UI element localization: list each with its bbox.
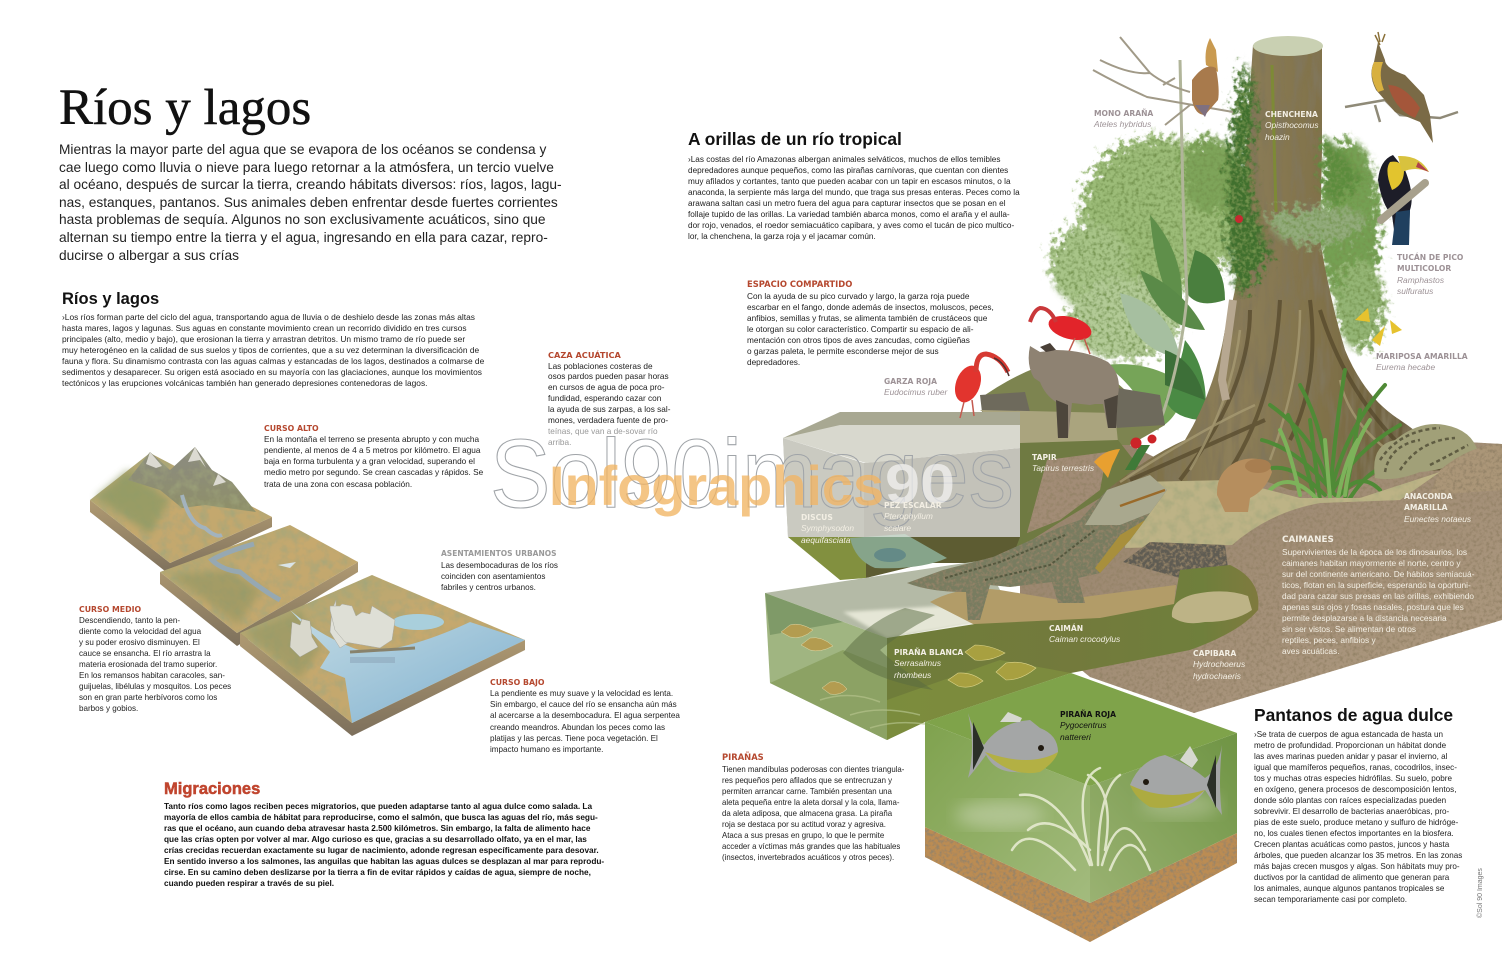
text: pantanos: árboles, que pueden alcanzar los 35 metros. En las zonas — [1254, 851, 1462, 860]
text: pirañas: aleta pequeña entre la aleta dorsal y la cola, llama- — [722, 798, 899, 806]
animal: spider monkey on branch — [1093, 37, 1233, 125]
watermark: Infographics: Infographics — [549, 454, 884, 517]
text: caimanes: Supervivientes de la época de los dinosaurios, los — [1282, 547, 1467, 557]
text: tropical river intro: ›Las costas del río Amazonas albergan animales selváticos, muchos de ellos temibles — [688, 154, 1000, 164]
watermark: 90: 90 — [885, 452, 955, 515]
label: anaconda amarilla: AMARILLA — [1404, 503, 1448, 512]
label: capibara: Hydrochoerus — [1193, 659, 1245, 669]
text: migraciones — [164, 802, 604, 888]
heading: espacio compartido: ESPACIO COMPARTIDO — [747, 279, 852, 289]
block: upper course mountains — [90, 447, 272, 575]
label: tucán: Ramphastos — [1397, 275, 1444, 285]
label: chenchena — [1265, 110, 1319, 142]
label: piraña roja: Pygocentrus — [1060, 720, 1107, 730]
text: migraciones: que las crías opten por volver al mar. Algo curioso es que, gracias a su desarrollado olfato, ya en el mar, las — [164, 835, 587, 844]
label: anaconda amarilla: ANACONDA — [1404, 492, 1453, 501]
label: mono araña: Ateles hybridus — [1094, 119, 1151, 129]
text: caza acuática: osos pardos pueden pasar horas — [548, 372, 669, 381]
water reflection streaks — [820, 695, 925, 728]
text: curso bajo — [490, 689, 680, 754]
label: anaconda amarilla — [1404, 492, 1471, 524]
text: pantanos: igual que mamíferos pequeños, ranas, cocodrilos, insec- — [1254, 763, 1457, 772]
text: migraciones: Tanto ríos como lagos reciben peces migratorios, que pueden adaptarse tanto al agua dulce como salada. La — [164, 802, 592, 810]
text: tropical river intro: depredadores aunque pequeños, como las pirañas carnívoras, que cuentan con dientes — [688, 166, 1008, 174]
text: pantanos: en oxígeno, genera procesos de descomposición lentos, — [1254, 785, 1456, 794]
text: curso bajo: al acercarse a la desembocadura. El agua serpentea — [490, 711, 680, 720]
plant: red and orange flowers — [1094, 434, 1156, 478]
text: tropical river intro: arawana saltan casi un metro fuera del agua para capturar insectos que se posan en el — [688, 198, 1006, 208]
plant: pale aquatic weed — [1012, 768, 1150, 870]
chart: river courses blocks — [90, 447, 525, 736]
heading: curso bajo: CURSO BAJO — [490, 678, 545, 687]
text: pirañas: acceder a víctimas más grandes que las habituales — [722, 842, 900, 850]
main title: Ríos y lagos — [59, 80, 311, 136]
intro text: alternan su tiempo entre la tierra y el agua, ingresando en ella para cazar, repro- — [59, 230, 548, 245]
text: curso alto: medio metro por segundo. Se crean cascadas y rápidos. Se — [264, 468, 483, 477]
river water block — [765, 560, 1258, 740]
label: mariposa amarilla — [1376, 352, 1468, 372]
intro text: cae luego como lluvia o nieve para luego retornar a la atmósfera, un tercio vuelve — [59, 160, 554, 175]
text: pantanos: tos y muchas otras especies hidrófilas. Su suelo, pobre — [1254, 774, 1452, 783]
heading: pantanos de agua dulce: Pantanos de agua dulce — [1254, 705, 1453, 725]
text: asentamientos urbanos — [441, 560, 558, 592]
heading: Ríos y lagos: Ríos y lagos — [62, 290, 159, 308]
heading: caimanes: CAIMANES — [1282, 535, 1334, 545]
text: caza acuática: mones, verdadera fuente de pro- — [548, 416, 668, 425]
text: caza acuática: en cursos de agua de poca pro- — [548, 383, 664, 392]
text: curso bajo: impacto humano es importante. — [490, 745, 603, 754]
heading: curso medio: CURSO MEDIO — [79, 605, 141, 614]
label: mono araña: MONO ARAÑA — [1094, 109, 1153, 118]
text: migraciones: crías crecidas recuerdan exactamente su lugar de nacimiento, adonde regresan específicamente para desovar. — [164, 846, 599, 855]
text: rivers and lakes — [62, 312, 484, 388]
text: pantanos — [1254, 730, 1462, 904]
label: garza roja: GARZA ROJA — [884, 377, 937, 386]
label: mariposa amarilla: MARIPOSA AMARILLA — [1376, 352, 1468, 361]
text: caza acuática: arriba. — [548, 438, 571, 447]
text: caimanes: aves acuáticas. — [1282, 646, 1340, 656]
labels over watermark panel: discus: DISCUS — [801, 513, 833, 522]
text: curso alto: pendiente, al menos de 4 a 5 metros por kilómetro. El agua — [264, 446, 480, 455]
text: pirañas: permiten arrancar carne. También presentan una — [722, 786, 892, 796]
label: piraña roja: PIRAÑA ROJA — [1060, 710, 1116, 719]
text: curso bajo: creando meandros. Abundan los peces como las — [490, 723, 665, 732]
text: pantanos: ductivos por la cantidad de alimento que generan para — [1254, 873, 1449, 882]
text: curso medio: son en gran parte herbívoros como los — [79, 692, 217, 702]
text: espacio compartido — [747, 292, 994, 367]
text: asentamientos urbanos: Las desembocaduras de los ríos — [441, 560, 558, 570]
labels over watermark panel: discus — [801, 513, 854, 545]
text: curso bajo: platijas y las percas. Tiene poca vegetación. El — [490, 734, 658, 743]
text: curso medio: cauce se ensancha. El río arrastra la — [79, 648, 211, 658]
text: tropical river intro — [688, 154, 1020, 240]
label: garza roja: Eudocimus ruber — [884, 387, 947, 397]
rocks — [1123, 542, 1228, 578]
text: pirañas: Tienen mandíbulas poderosas con dientes triangula- — [722, 764, 904, 774]
text: migraciones: ras que el océano, aun cuando deba atravesar hasta 2.500 kilómetros. Sin embargo, la falta de alimento hace — [164, 824, 590, 833]
distant bank with rocks and water — [980, 368, 1165, 446]
label: piraña roja — [1060, 710, 1116, 742]
text: pirañas: da aleta adiposa, que almacena grasa. La piraña — [722, 808, 892, 818]
tree trunk and buttress roots — [1107, 36, 1455, 510]
label: pez escalar — [884, 501, 942, 533]
label: piraña blanca: Serrasalmus — [894, 658, 941, 668]
text: pirañas — [722, 764, 904, 862]
foliage: background tree — [1050, 137, 1384, 360]
text: espacio compartido: anfibios, semillas y frutas, se alimenta también de crustáceos que — [747, 314, 987, 323]
text: caimanes: reptiles, peces, anfibios y — [1282, 635, 1376, 645]
animal: caiman — [843, 475, 1167, 690]
watermark: Sol90images outline: Sol90images — [490, 419, 1014, 528]
text: pantanos: Crecen plantas acuáticas como pastos, juncos y hasta — [1254, 840, 1449, 849]
chart: tropical river habitat cross-section — [765, 32, 1502, 942]
heading: asentamientos urbanos: ASENTAMIENTOS URBANOS — [441, 549, 557, 558]
label: pez escalar: scalare — [884, 523, 911, 533]
animal: capybara on bank — [1217, 458, 1272, 512]
text: curso medio: barbos y gobios. — [79, 704, 138, 712]
labels over watermark panel: discus: aequifasciata — [801, 535, 850, 545]
label: caimán: Caiman crocodylus — [1049, 634, 1120, 644]
text: pantanos: ›Se trata de cuerpos de agua estancada de hasta un — [1254, 730, 1443, 738]
text: espacio compartido: depredadores. — [747, 358, 800, 367]
mossy sand bank — [1125, 472, 1440, 548]
heading: migraciones: Migraciones — [164, 780, 260, 798]
text: caza acuática — [548, 362, 670, 447]
label: anaconda amarilla: Eunectes notaeus — [1404, 514, 1471, 524]
animal: white piranhas — [781, 624, 847, 694]
text: tropical river intro: lor, la chenchena, la garza roja y el jacamar común. — [688, 232, 876, 240]
swamp cube — [925, 673, 1237, 942]
text: caimanes: ticos, flotan en la superficie, esperando la oportuni- — [1282, 580, 1471, 590]
animal: scarlet ibis right — [1030, 308, 1094, 358]
label: pez escalar: PEZ ESCALAR — [884, 501, 942, 510]
text: curso alto: trata de una zona con escasa población. — [264, 480, 412, 489]
label: capibara: hydrochaeris — [1193, 671, 1241, 681]
intro text: al océano, después de surcar la tierra, creando hábitats diversos: ríos, lagos, lagu- — [59, 177, 562, 192]
animal: scarlet ibis left — [950, 354, 1009, 418]
text: rivers and lakes: sedimentos y desaparecer. Su origen está asociado en su mayoría con las glaciaciones, aunque los movimientos — [62, 367, 482, 377]
label: piraña roja: nattereri — [1060, 732, 1091, 742]
text: curso alto: baja en forma turbulenta y a gran velocidad, superando el — [264, 457, 475, 466]
intro text: Mientras la mayor parte del agua que se evapora de los océanos se condensa y — [59, 142, 546, 157]
text: caza acuática: fundidad, esperando cazar con — [548, 394, 661, 403]
text: caza acuática: la ayuda de sus zarpas, a los sal- — [548, 405, 670, 414]
animal: hoatzin on branch — [1345, 32, 1458, 143]
text: pantanos: pias de este suelo, produce metano y sulfuro de hidróge- — [1254, 818, 1458, 827]
text: curso alto: En la montaña el terreno se presenta abrupto y con mucha — [264, 434, 479, 444]
animal: tapir — [1029, 343, 1119, 438]
text: pirañas: Ataca a sus presas en grupo, lo que le permite — [722, 830, 884, 840]
label: tapir — [1032, 453, 1094, 473]
animal: toucan — [1378, 155, 1429, 245]
label: tucán: TUCÁN DE PICO — [1397, 253, 1463, 262]
ground right of tree — [1430, 444, 1502, 495]
text: caimanes: permite desplazarse a la distancia necesaria — [1282, 613, 1447, 623]
text: tropical river intro: follaje tupido de las orillas. La variedad también abarca monos, como el araña y el aulla- — [688, 210, 1010, 218]
text: migraciones: cuando pueden respirar a través de su piel. — [164, 879, 334, 888]
text: curso medio: y su poder erosivo disminuyen. El — [79, 638, 200, 646]
label: garza roja — [884, 377, 948, 397]
text: espacio compartido: o garzas paleta, le permite esconderse mejor de sus — [747, 347, 939, 356]
label: caimán: CAIMÁN — [1049, 624, 1083, 633]
text: curso medio: diente como la velocidad del agua — [79, 626, 201, 636]
text: pantanos: los animales, aunque algunos pantanos tropicales se — [1254, 884, 1444, 893]
animal: white piranhas in dark water — [948, 645, 1036, 687]
heading: caza acuática: CAZA ACUÁTICA — [548, 350, 621, 360]
labels over watermark panel: discus: Symphysodon — [801, 523, 854, 533]
text: pantanos: más bajas crecen musgos y algas. Son hábitats muy pro- — [1254, 862, 1460, 871]
label: chenchena: hoazin — [1265, 132, 1290, 142]
heading: curso alto: CURSO ALTO — [264, 424, 319, 433]
label: piraña blanca — [894, 648, 964, 680]
text: espacio compartido: escarbar en el fango, donde además de insectos, moluscos, peces, — [747, 303, 994, 312]
soil mass — [1020, 440, 1502, 713]
animal: red piranha right — [1130, 745, 1222, 815]
text: curso medio — [79, 616, 231, 712]
text: pantanos: secan temporariamente casi por completo. — [1254, 895, 1407, 904]
text: curso medio: materia erosionada del tramo superior. — [79, 660, 217, 668]
text: caimanes: dad para cazar sus presas en las orillas, exhibiendo — [1282, 591, 1474, 601]
label: tucán: sulfuratus — [1397, 286, 1433, 296]
text: caimanes: apenas sus ojos y fosas nasales, postura que les — [1282, 602, 1464, 612]
animal: red piranha left — [968, 712, 1058, 778]
text: caimanes: sur del continente americano. De hábitos semiacuá- — [1282, 569, 1474, 579]
plant: banana leaves — [1106, 215, 1225, 430]
text: curso bajo: La pendiente es muy suave y la velocidad es lenta. — [490, 689, 673, 698]
text: pantanos: sobrevivir. El desarrollo de bacterias anaeróbicas, pro- — [1254, 807, 1449, 816]
text: pantanos: metro de profundidad. Proporcionan un hábitat donde — [1254, 741, 1446, 750]
text: rivers and lakes: principales (alto, medio y bajo), que erosionan la tierra y arrastran detritos. Un mismo tramo de río puede ser — [62, 334, 465, 344]
text: rivers and lakes: fauna y flora. Su dinamismo contrasta con las aguas calmas y estancadas de los lagos, destinados a colmarse de — [62, 356, 484, 366]
label: tapir: Tapirus terrestris — [1032, 463, 1094, 473]
label: piraña blanca: PIRAÑA BLANCA — [894, 648, 963, 657]
text: curso medio: Descendiendo, tanto la pen- — [79, 616, 180, 624]
text: pantanos: no, los cuales tienen efectos importantes en la biosfera. — [1254, 829, 1454, 838]
text: pantanos: donde sólo plantas con raíces especializadas pueden — [1254, 796, 1446, 805]
soil cut below bank — [1027, 452, 1107, 533]
foreground plants at tree base — [1262, 370, 1400, 500]
label: caimán — [1049, 624, 1120, 644]
label: chenchena: CHENCHENA — [1265, 110, 1318, 119]
heading: pirañas: PIRAÑAS — [722, 752, 764, 762]
credit: ©Sol 90 Images — [1477, 868, 1484, 918]
vines and epiphytes on trunk — [1228, 62, 1365, 295]
text: caimanes: sin ser vistos. Se alimentan de otros — [1282, 624, 1416, 634]
text: migraciones: mayoría de ellos cambia de hábitat para reproducirse, como el salmón, que busca las aguas del río, más segu- — [164, 813, 598, 822]
block: middle course — [160, 525, 358, 646]
text: espacio compartido: le otorgan su color característico. Compartir su espacio de ali- — [747, 325, 974, 334]
text: caimanes: caimanes habitan mayormente el norte, centro y — [1282, 558, 1461, 568]
label: tucán — [1397, 252, 1463, 296]
text: curso medio: En los remansos habitan caracoles, san- — [79, 670, 225, 680]
intro text — [59, 142, 562, 263]
icon: yellow butterflies — [1355, 308, 1402, 346]
label: pez escalar: Pterophyllum — [884, 511, 933, 521]
green bank slope — [1000, 440, 1140, 560]
text: asentamientos urbanos: coinciden con asentamientos — [441, 572, 545, 580]
heading: a orillas de un río tropical: A orillas de un río tropical — [688, 129, 902, 149]
text: caimanes — [1282, 547, 1474, 656]
text: tropical river intro: anaconda, la serpiente más larga del mundo, que traga sus presas enteras. Peces como la — [688, 188, 1020, 196]
label: capibara — [1193, 649, 1245, 681]
text: caza acuática: Las poblaciones costeras de — [548, 362, 653, 370]
text: pantanos: las aves marinas pueden anidar y pasar el invierno, al — [1254, 752, 1447, 761]
label: tapir: TAPIR — [1032, 453, 1057, 462]
intro text: hasta problemas de sequía. Algunos no son exclusivamente acuáticos, sino que — [59, 212, 546, 227]
intro text: nas, estanques, pantanos. Sus animales deben enfrentar desde fuertes corrientes — [59, 195, 558, 210]
label: mono araña — [1094, 108, 1154, 129]
text: caza acuática: teínas, que van a de-sovar río — [548, 427, 658, 436]
label: mariposa amarilla: Eurema hecabe — [1376, 362, 1435, 372]
text: migraciones: cirse. En su camino deben deslizarse por la tierra a fin de evitar rápidos y caídas de agua, siempre de noche, — [164, 868, 591, 877]
text: curso bajo: Sin embargo, el cauce del río se ensancha aún más — [490, 700, 677, 709]
label: capibara: CAPIBARA — [1193, 649, 1236, 658]
text: curso alto — [264, 434, 483, 489]
intro text: ducirse o albergar a sus crías — [59, 248, 239, 263]
text: pirañas: roja se destaca por su actitud voraz y agresiva. — [722, 820, 886, 828]
text: pirañas: (insectos, invertebrados acuáticos y otros peces). — [722, 852, 894, 862]
text: curso medio: guijuelas, libélulas y mosquitos. Los peces — [79, 682, 231, 690]
text: migraciones: En sentido inverso a los salmones, las anguilas que habitan las aguas dulces se desplazan al mar para reprodu- — [164, 857, 604, 866]
label: piraña blanca: rhombeus — [894, 670, 931, 680]
text: rivers and lakes: tectónicos y las erupciones volcánicas también han generado depresiones contenedoras de lagos. — [62, 378, 427, 388]
label: tucán: MULTICOLOR — [1397, 264, 1451, 273]
text: rivers and lakes: ›Los ríos forman parte del ciclo del agua, transportando agua de lluvia o de deshielo desde las zonas más altas — [62, 312, 475, 322]
sapling pole — [1157, 60, 1187, 430]
animal: submerged capybara — [1172, 591, 1252, 623]
label: chenchena: Opisthocomus — [1265, 120, 1319, 130]
animal: anaconda — [1374, 424, 1478, 479]
text: tropical river intro: muy afilados y cortantes, tanto que pueden acabar con un tapir en escasos minutos, o la — [688, 176, 1011, 186]
text: rivers and lakes: muy heterogéneo en la calidad de sus suelos y tipos de corrientes, que a su vez determinan la diversificación de — [62, 345, 479, 355]
text: espacio compartido: Con la ayuda de su pico curvado y largo, la garza roja puede — [747, 292, 969, 301]
upper water block — [783, 412, 1020, 580]
block: lower course with city and sea — [240, 575, 525, 736]
text: asentamientos urbanos: fabriles y centros urbanos. — [441, 582, 536, 592]
text: tropical river intro: dor rojo, venados, el roedor semiacuático capibara, y aves como el tucán de pico multico- — [688, 220, 1014, 230]
text: espacio compartido: mentación con otros tipos de aves zancudas, como cigüeñas — [747, 336, 970, 345]
text: pirañas: res pequeños pero afilados que se entrecruzan y — [722, 776, 892, 784]
text: rivers and lakes: hasta mares, lagos y lagunas. Sus aguas en constante movimiento crean un recorrido dividido en tres cursos — [62, 323, 467, 333]
